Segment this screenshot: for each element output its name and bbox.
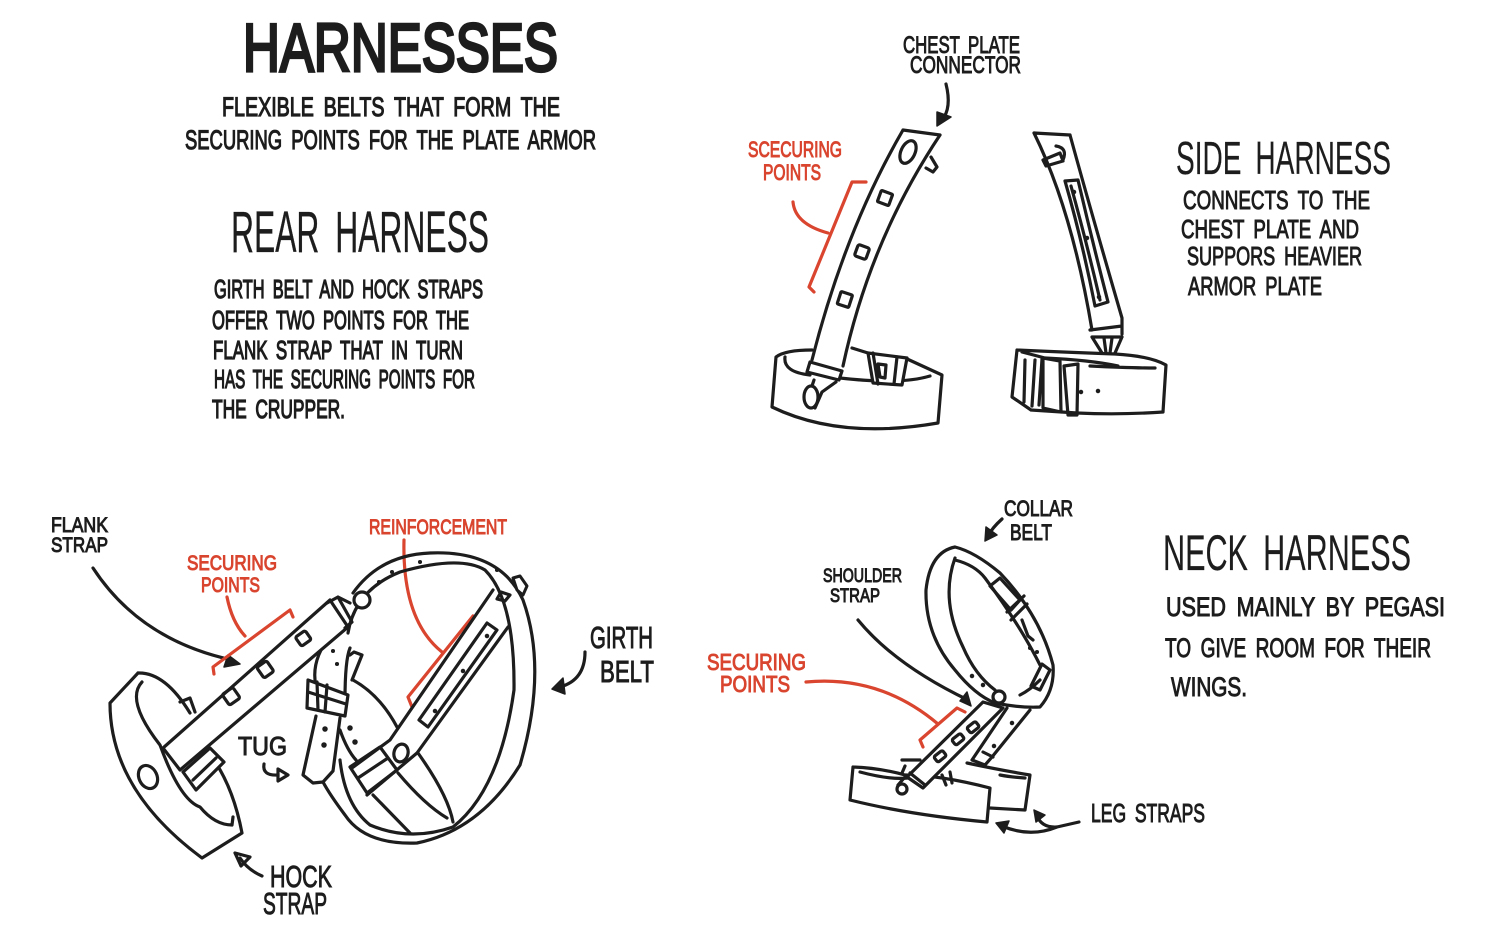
collar <box>926 547 1053 707</box>
subtitle <box>185 92 596 155</box>
collar buckle <box>990 578 1050 690</box>
front leg belt <box>850 767 990 822</box>
strap band and ring <box>807 362 842 380</box>
text block: side harness description: CONNECTS TO THE <box>1183 185 1370 215</box>
text block: side harness description <box>1181 185 1370 301</box>
subtitle: SECURING POINTS FOR THE PLATE ARMOR <box>185 125 596 155</box>
arrow: tug <box>264 764 288 781</box>
oval hole and squares <box>897 138 919 166</box>
label: girth belt <box>590 620 654 689</box>
label: hock strap: HOCK <box>270 859 332 894</box>
label: girth belt: GIRTH <box>590 620 653 655</box>
label: girth belt: BELT <box>600 654 654 689</box>
label: flank strap <box>51 514 108 557</box>
label: shoulder strap <box>823 566 902 607</box>
label: securing points, rear harness <box>187 552 277 597</box>
inner curves <box>340 680 453 833</box>
label: flank strap: STRAP <box>51 534 108 557</box>
label: hock strap <box>263 859 332 921</box>
label: leg straps: LEG STRAPS <box>1091 798 1205 828</box>
label: securing points, neck harness: POINTS <box>720 671 790 697</box>
heading: rear harness: REAR HARNESS <box>231 200 489 265</box>
tab <box>1043 146 1064 166</box>
stud <box>513 576 527 595</box>
label: collar belt: BELT <box>1010 520 1052 545</box>
label: securing points, rear harness: POINTS <box>201 574 260 597</box>
label: securing points, neck harness: SECURING <box>707 649 806 675</box>
label: collar belt <box>1004 496 1073 545</box>
text block: rear harness description: FLANK STRAP THAT IN TURN <box>213 335 463 365</box>
bracket: reinforcement <box>404 540 473 707</box>
title: HARNESSES <box>243 10 558 86</box>
illustration: flank strap <box>163 592 370 770</box>
shoulder strap <box>907 702 1003 788</box>
illustration: hock strap <box>110 673 242 858</box>
plate <box>1065 180 1108 306</box>
arrow: girth belt <box>552 652 585 694</box>
text block: rear harness description: THE CRUPPER. <box>212 394 345 424</box>
reinforced strap <box>352 590 508 795</box>
label: securing points, neck harness <box>707 649 806 697</box>
label: securing points, side harness: POINTS <box>763 160 821 185</box>
subtitle: FLEXIBLE BELTS THAT FORM THE <box>222 92 560 122</box>
belt <box>772 348 942 429</box>
outer and inner ring <box>323 553 535 843</box>
arrow: collar belt <box>985 519 1002 541</box>
label: securing points, rear harness: SECURING <box>187 552 277 575</box>
illustration: tug buckle <box>303 640 362 783</box>
label: shoulder strap: STRAP <box>830 586 880 607</box>
belt loops <box>1024 358 1078 415</box>
text block: side harness description: ARMOR PLATE <box>1188 271 1322 301</box>
belt <box>1012 350 1166 414</box>
label: reinforcement: REINFORCEMENT <box>369 516 507 539</box>
arrow: chest plate connector <box>937 84 951 126</box>
label: securing points, side harness: SCECURING <box>748 137 842 162</box>
strap <box>1034 133 1122 353</box>
strap band <box>350 747 397 793</box>
text block: rear harness description: GIRTH BELT AND HOCK STRAPS <box>214 274 483 304</box>
second strap <box>972 708 1030 765</box>
arrows: leg straps <box>996 810 1079 833</box>
label: flank strap: FLANK <box>51 514 108 537</box>
label: hock strap: STRAP <box>263 886 327 921</box>
bracket: securing points, neck harness <box>806 681 965 747</box>
label: collar belt: COLLAR <box>1004 496 1073 521</box>
illustration: side harness back <box>1012 133 1166 415</box>
label: chest plate connector: CONNECTOR <box>910 52 1021 79</box>
label: securing points, side harness <box>748 137 842 185</box>
illustration: neck harness <box>850 547 1053 822</box>
text block: side harness description: SUPPORS HEAVIER <box>1187 241 1362 271</box>
bracket: securing points, side harness <box>793 182 866 292</box>
buckle <box>868 353 907 385</box>
arrow: flank strap <box>93 568 240 667</box>
text block: rear harness description <box>212 274 483 424</box>
illustration: side harness front <box>772 130 942 429</box>
arrow: shoulder strap <box>858 620 971 706</box>
label: shoulder strap: SHOULDER <box>823 566 902 587</box>
text block: rear harness description: OFFER TWO POINTS FOR THE <box>212 305 469 335</box>
illustration: girth belt <box>323 553 535 843</box>
back leg belt <box>967 763 1030 810</box>
text block: rear harness description: HAS THE SECURING POINTS FOR <box>214 364 475 394</box>
text block: neck harness description <box>1165 592 1445 702</box>
label: chest plate connector: CHEST PLATE <box>903 32 1020 59</box>
label: tug: TUG <box>238 731 287 761</box>
bracket: securing points, rear harness <box>213 597 293 674</box>
label: chest plate connector <box>903 32 1021 79</box>
arrow: hock strap <box>235 853 262 876</box>
strap <box>812 130 940 366</box>
text block: side harness description: CHEST PLATE AND <box>1181 214 1359 244</box>
text block: neck harness description: WINGS. <box>1171 672 1247 702</box>
